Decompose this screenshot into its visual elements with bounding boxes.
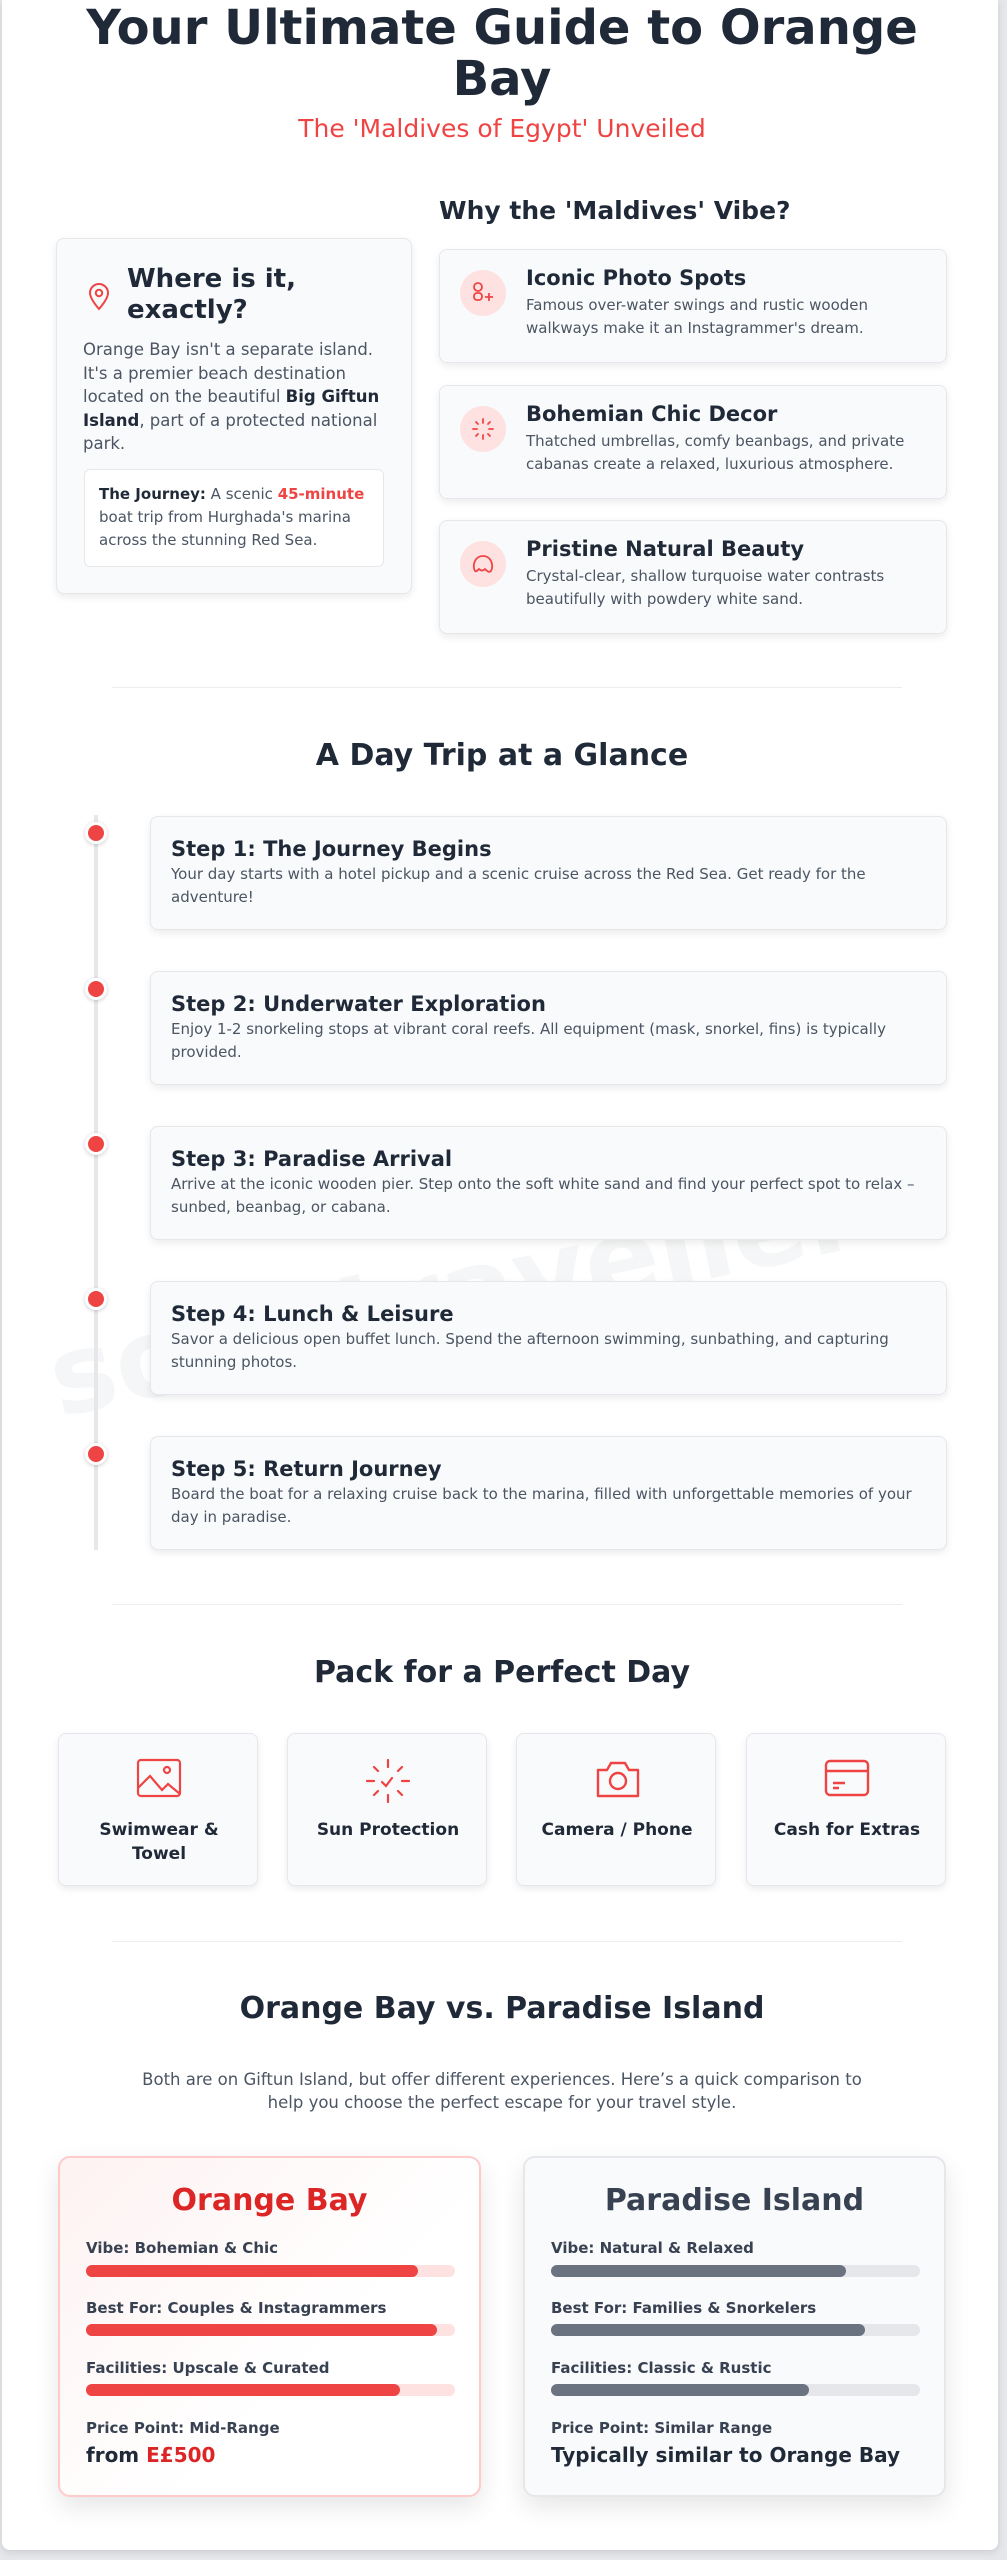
timeline (83, 815, 109, 1550)
panel: paradise island: Best For: Families & Snorkelers (551, 2299, 816, 2317)
card: pristine natural beauty: Pristine Natural Beauty (526, 537, 804, 561)
card: bohemian chic decor: Bohemian Chic Decor (526, 402, 777, 426)
card: iconic photo spots: Famous over-water swings and rustic wooden walkways make it an Instagrammer's dream. (526, 296, 868, 337)
heading: comparison: Orange Bay vs. Paradise Island (240, 1991, 764, 2026)
card: iconic photo spots (439, 249, 947, 363)
pack: sun protection (287, 1733, 487, 1886)
pack: swimwear: Swimwear & (99, 1820, 219, 1840)
panel: orange bay: Facilities: Upscale & Curated (86, 2359, 329, 2377)
step 4 (150, 1281, 947, 1395)
step 3 (150, 1126, 947, 1240)
text block: Orange Bay isn't a separate island. It's a premier beach destination located on the beautiful Big Giftun Island, part of a protected national park. (83, 340, 379, 453)
panel: orange bay: Price Point: Mid-Range (86, 2419, 280, 2437)
heading: day trip: A Day Trip at a Glance (316, 738, 688, 773)
step 2: Step 2: Underwater Exploration (171, 992, 546, 1016)
step 2: Enjoy 1-2 snorkeling stops at vibrant coral reefs. All equipment (mask, snorkel, fins) is typically provided. (171, 1020, 886, 1061)
icon: map pin (89, 283, 109, 310)
panel: where is it (56, 238, 412, 594)
step 1 (150, 816, 947, 930)
icon: shell (460, 541, 506, 587)
panel: paradise island: Price Point: Similar Range (551, 2419, 772, 2437)
panel: paradise island: Typically similar to Orange Bay (551, 2443, 900, 2467)
panel: paradise island: Vibe: Natural & Relaxed (551, 2239, 754, 2257)
pack: swimwear (58, 1733, 258, 1886)
panel: orange bay (58, 2156, 481, 2497)
step 5 (150, 1436, 947, 1550)
panel: orange bay: from E£500 (86, 2443, 215, 2467)
panel: orange bay: Best For: Couples & Instagrammers (86, 2299, 386, 2317)
watermark: solo traveller (38, 1146, 871, 1442)
panel: orange bay: Vibe: Bohemian & Chic (86, 2239, 278, 2257)
heading (127, 264, 296, 325)
panel: paradise island: Facilities: Classic & Rustic (551, 2359, 772, 2377)
step 5: Board the boat for a relaxing cruise back to the marina, filled with unforgettable memories of your day in paradise. (171, 1485, 912, 1526)
callout: journey: The Journey: A scenic 45-minute boat trip from Hurghada's marina across the stunning Red Sea. (99, 485, 364, 549)
pack: camera: Camera / Phone (542, 1820, 692, 1840)
step 5: Step 5: Return Journey (171, 1457, 442, 1481)
pack: sun protection: Sun Protection (317, 1820, 459, 1840)
step 4: Step 4: Lunch & Leisure (171, 1302, 454, 1326)
card: bohemian chic decor: Thatched umbrellas, comfy beanbags, and private cabanas create a relaxed, luxurious atmosphere. (526, 432, 904, 473)
pack: cash: Cash for Extras (774, 1820, 920, 1840)
title (86, 0, 918, 107)
card: pristine natural beauty (439, 520, 947, 634)
heading: pack: Pack for a Perfect Day (314, 1655, 690, 1690)
title: Your Ultimate Guide to Orange (86, 0, 918, 56)
icon: sparkle (460, 406, 506, 452)
card: iconic photo spots: Iconic Photo Spots (526, 266, 746, 290)
callout: journey (84, 469, 384, 567)
panel: orange bay: Orange Bay (172, 2183, 367, 2218)
step 3: Arrive at the iconic wooden pier. Step onto the soft white sand and find your perfect spot to relax – sunbed, beanbag, or cabana. (171, 1175, 914, 1216)
step 1: Step 1: The Journey Begins (171, 837, 492, 861)
heading: why maldives vibe: Why the 'Maldives' Vibe? (439, 196, 791, 225)
subtitle: The 'Maldives of Egypt' Unveiled (298, 114, 706, 143)
title: Bay (453, 51, 551, 107)
icon: photo spots (460, 270, 506, 316)
step 4: Savor a delicious open buffet lunch. Spend the afternoon swimming, sunbathing, and capturing stunning photos. (171, 1330, 889, 1371)
step 3: Step 3: Paradise Arrival (171, 1147, 452, 1171)
heading: exactly? (127, 295, 248, 325)
pack: cash (746, 1733, 946, 1886)
card: bohemian chic decor (439, 385, 947, 499)
panel: paradise island (523, 2156, 946, 2497)
pack: swimwear: Towel (132, 1844, 186, 1864)
card: pristine natural beauty: Crystal-clear, shallow turquoise water contrasts beautifully with powdery white sand. (526, 567, 884, 608)
step 1: Your day starts with a hotel pickup and a scenic cruise across the Red Sea. Get ready for the adventure! (171, 865, 866, 906)
step 2 (150, 971, 947, 1085)
heading: Where is it, (127, 264, 296, 294)
panel: paradise island: Paradise Island (605, 2183, 864, 2218)
pack: camera (516, 1733, 716, 1886)
intro text: Both are on Giftun Island, but offer different experiences. Here’s a quick comparison to help you choose the perfect escape for your travel style. (142, 2070, 862, 2112)
